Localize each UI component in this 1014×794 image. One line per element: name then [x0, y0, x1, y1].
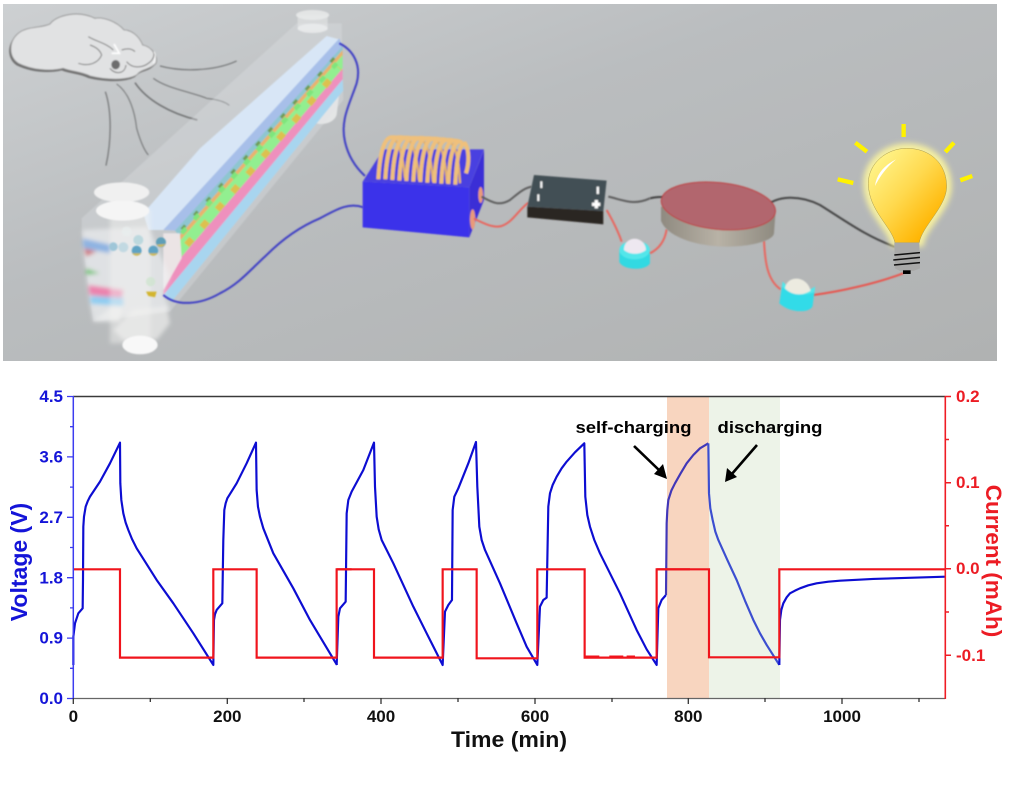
left axis: voltage: 0.9 [39, 628, 63, 648]
light rays [838, 124, 972, 183]
icon: energy storage disc [659, 177, 778, 247]
icon: device front end with inlet cylinder [83, 210, 170, 343]
panel: voltage and current chart [6, 387, 1006, 752]
layer stack side [163, 38, 343, 302]
panel: self-charging system illustration [3, 4, 997, 361]
inlet cylinder [110, 210, 170, 343]
icon: triboelectric generator device [82, 10, 343, 322]
wires: generator to transformer [163, 43, 365, 303]
right axis: current: -0.1 [956, 646, 985, 665]
wind lines [105, 61, 237, 166]
coil back strands [393, 138, 460, 183]
icon: light bulb [838, 124, 972, 274]
wires: transformer to rectifier [474, 187, 650, 242]
coil windings [378, 137, 468, 185]
left axis title: Voltage (V) [6, 503, 32, 621]
right axis title: Current (mAh) [981, 485, 1006, 637]
right axis: current: 0.0 [956, 559, 980, 578]
left axis: voltage: 4.5 [39, 387, 63, 406]
inlet and outlet caps with particles [94, 182, 166, 354]
icon: transformer coil [363, 137, 484, 237]
label: self-charging: self-charging [576, 418, 692, 437]
right axis: current [945, 387, 985, 665]
arrow: self-charging [634, 446, 667, 479]
label: discharging: discharging [718, 418, 822, 437]
icon: rectifier [527, 175, 607, 224]
wires: storage to bulb [650, 197, 903, 295]
bottom axis: time: 600 [521, 707, 549, 726]
left axis: voltage: 2.7 [39, 508, 63, 527]
bottom axis title: Time (min) [451, 727, 567, 752]
translucent housing [82, 23, 343, 322]
top electrode layer [143, 36, 339, 230]
back cylinder [296, 10, 339, 124]
icon: LED indicator 2 [779, 279, 815, 311]
left axis: voltage [39, 387, 73, 708]
bottom axis: time: 0 [69, 707, 78, 726]
left axis: voltage: 1.8 [39, 568, 63, 588]
bottom axis: time: 400 [367, 707, 395, 726]
icon: LED indicator 1 [619, 239, 650, 269]
right axis: current: 0.2 [956, 387, 980, 406]
bottom axis: time: 1000 [823, 707, 861, 726]
arrow: discharging [725, 445, 757, 482]
front face layers [83, 227, 170, 322]
left axis: voltage: 0.0 [39, 689, 63, 708]
current curve [73, 569, 945, 658]
bottom axis: time [69, 698, 919, 726]
icon: wind cloud [9, 14, 156, 81]
shaded band: discharging [709, 397, 780, 698]
right axis: current: 0.1 [956, 473, 980, 492]
shaded band: self-charging [667, 397, 709, 698]
bottom axis: time: 200 [213, 707, 241, 726]
axes frame [73, 396, 945, 699]
illustration background [3, 4, 997, 361]
bottom axis: time: 800 [674, 707, 702, 726]
left axis: voltage: 3.6 [39, 448, 63, 466]
voltage curve [73, 442, 945, 665]
